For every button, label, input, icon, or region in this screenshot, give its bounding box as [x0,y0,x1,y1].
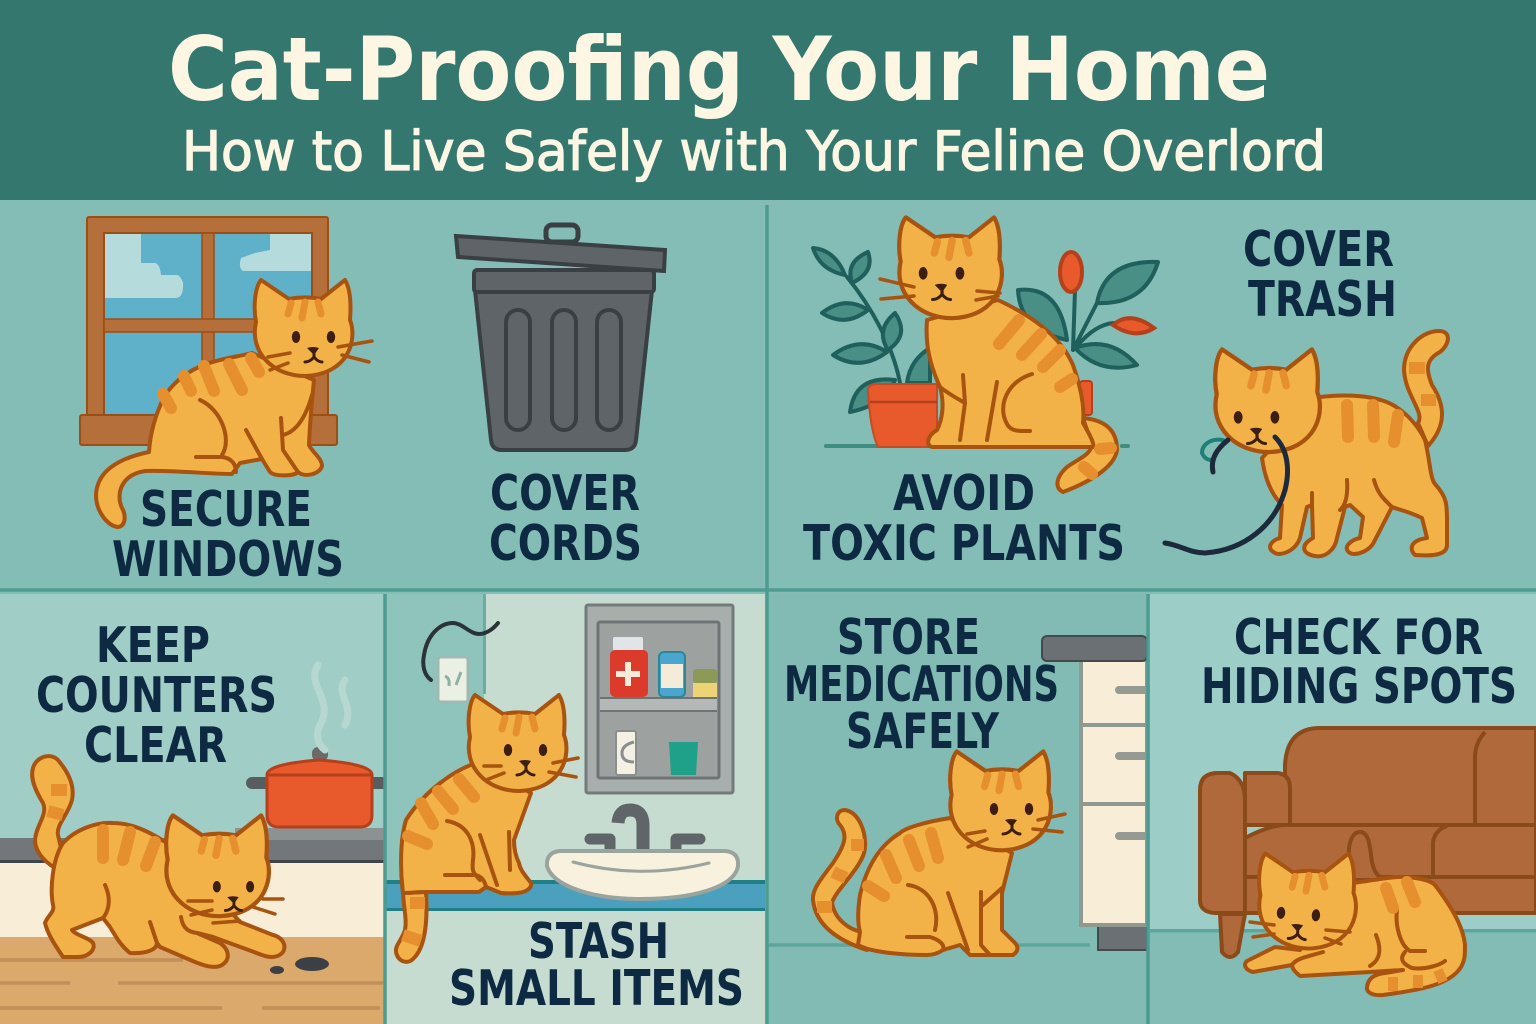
panel: keep counters clear [0,594,384,1024]
icon: cat chewing cord [1215,331,1448,556]
panel: avoid toxic plants [803,217,1158,572]
label: COUNTERS [36,667,277,724]
icon: sink and faucet [547,810,738,899]
label [1201,609,1517,715]
debris [270,957,329,974]
label: COVER [490,465,640,522]
label [784,609,1059,760]
dividers [0,205,1536,1024]
icon: trash can [456,225,665,450]
label [803,465,1125,572]
label [36,617,277,774]
panel: secure windows [80,217,372,588]
label [112,481,344,588]
icon: flower pot [868,381,1092,447]
label: KEEP [96,617,210,674]
icon: sitting cat [880,217,1117,492]
label: SMALL ITEMS [449,960,744,1017]
label: AVOID [893,465,1035,522]
icon: wall outlet and cord [423,623,498,702]
icon: window [80,217,337,445]
label: WINDOWS [112,531,344,588]
label: STORE [837,609,980,666]
label: CORDS [489,515,642,572]
panel: stash small items [386,594,765,1024]
label: TOXIC PLANTS [803,515,1125,572]
icon: sofa [1200,728,1536,957]
label [489,465,642,572]
steam [315,665,348,750]
header band [0,0,1536,200]
label: MEDICATIONS [784,656,1059,713]
label: SECURE [140,481,312,538]
icon: sitting cat with hanging tail [396,695,578,962]
panel: cover cords [456,225,665,572]
icon: red pot [252,747,382,827]
icon: cat on sill [96,280,372,527]
panel: cover trash [1165,221,1448,556]
panel: store medications safely [768,594,1147,1024]
icon: cord [1165,437,1288,553]
counter top [386,880,765,911]
panel: check for hiding spots [1150,594,1536,1024]
icon: lying cat [1245,854,1465,995]
label: COVER [1243,221,1394,278]
icon: medicine cabinet [586,605,733,793]
icon: sitting cat [813,751,1065,955]
label: STASH [528,913,669,970]
label: CLEAR [84,717,227,774]
icon: plants [813,248,1158,412]
label [1243,221,1397,328]
subtitle: How to Live Safely with Your Feline Overlord [182,120,1326,183]
icon: crouching cat [32,756,284,967]
wooden floor [0,937,384,1024]
title: Cat-Proofing Your Home [168,18,1270,121]
floor line [826,444,1128,448]
icon: cabinet [1042,636,1147,950]
counter and cabinet [0,828,384,937]
label: CHECK FOR [1234,609,1483,666]
label: SAFELY [846,703,1000,760]
label: TRASH [1248,271,1397,328]
label [449,913,744,1017]
